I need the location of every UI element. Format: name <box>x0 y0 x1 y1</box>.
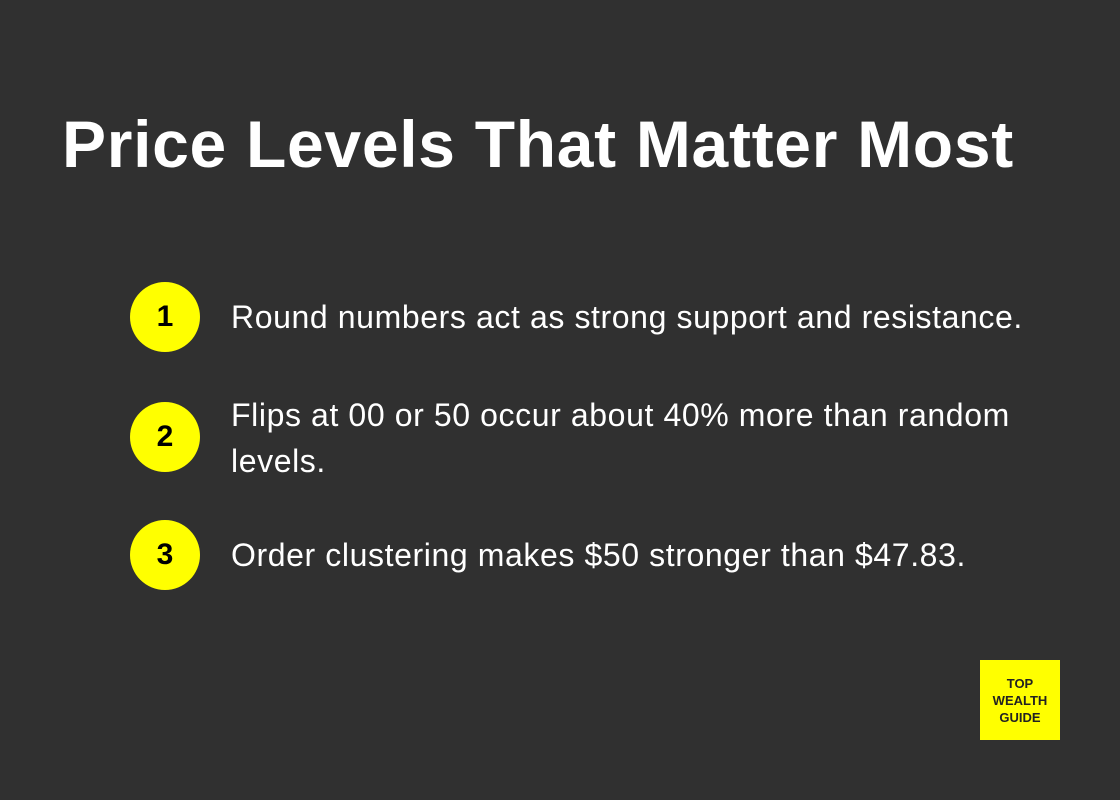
badge 1 <box>130 282 200 352</box>
logo: GUIDE <box>999 710 1041 724</box>
text 1: Round numbers act as strong support and resistance. <box>231 299 1023 335</box>
badge 3: 3 <box>157 538 173 571</box>
text 2: Flips at 00 or 50 occur about 40% more than random levels. <box>231 397 1010 479</box>
badge 2 <box>130 402 200 472</box>
item 1 <box>130 282 1023 352</box>
text 3: Order clustering makes $50 stronger than $47.83. <box>231 537 966 573</box>
title: Price Levels That Matter Most <box>62 107 1014 181</box>
item 3 <box>130 520 966 590</box>
logo <box>980 660 1060 740</box>
item 2 <box>130 397 1010 479</box>
logo: TOP <box>1007 676 1033 690</box>
badge 3 <box>130 520 200 590</box>
badge 1: 1 <box>157 300 173 333</box>
badge 2: 2 <box>157 420 173 453</box>
logo: WEALTH <box>993 692 1047 708</box>
